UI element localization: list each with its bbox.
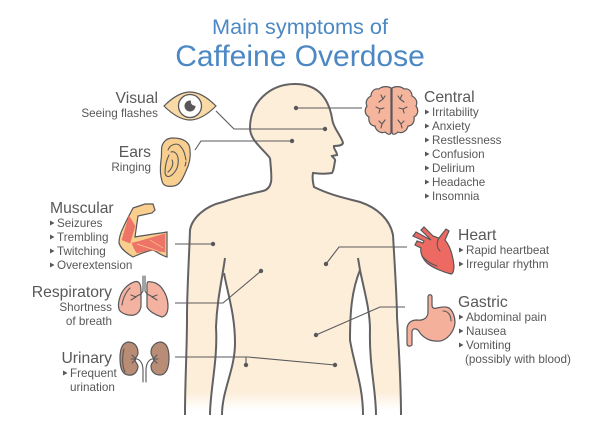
label: muscular: Muscular: [50, 200, 114, 217]
label: gastric: Vomiting: [466, 339, 511, 352]
label: central: Insomnia: [432, 190, 480, 203]
label: central: Anxiety: [432, 120, 470, 133]
label: visual: Seeing flashes: [81, 107, 158, 120]
label: visual: Visual: [116, 90, 158, 107]
label: ears: [111, 144, 151, 174]
label: central: Irritability: [432, 106, 479, 119]
icon: ear: [160, 138, 190, 186]
title: [175, 14, 425, 73]
label: central: Headache: [432, 176, 485, 189]
label: urinary: Urinary: [61, 350, 112, 367]
label: gastric: Gastric: [458, 294, 508, 311]
label: ears: Ears: [119, 144, 151, 161]
label: urinary: [61, 350, 118, 394]
label: central: Central: [424, 89, 475, 106]
label: heart: Irregular rhythm: [466, 258, 548, 271]
label: muscular: Seizures: [57, 217, 103, 230]
label: central: Delirium: [432, 162, 475, 175]
label: respiratory: of breath: [66, 315, 112, 328]
label: gastric: Nausea: [466, 325, 507, 338]
label: central: Confusion: [432, 148, 485, 161]
title: Main symptoms of: [212, 14, 389, 39]
label: gastric: [458, 294, 571, 366]
label: visual: [81, 90, 158, 120]
label: heart: [458, 227, 550, 271]
label: gastric: Abdominal pain: [466, 311, 547, 324]
icon: eye: [164, 92, 216, 120]
title: Caffeine Overdose: [175, 40, 425, 73]
label: central: [424, 89, 502, 203]
label: central: Restlessness: [432, 134, 502, 147]
icon: kidneys: [120, 342, 169, 382]
label: urinary: urination: [70, 381, 115, 394]
label: respiratory: [32, 284, 112, 328]
label: heart: Heart: [458, 227, 497, 244]
label: respiratory: Respiratory: [32, 284, 112, 301]
icon: lungs: [118, 276, 168, 317]
human body silhouette: [180, 84, 406, 418]
label: heart: Rapid heartbeat: [466, 244, 550, 257]
label: gastric: (possibly with blood): [465, 353, 571, 366]
label: urinary: Frequent: [70, 367, 118, 380]
label: ears: Ringing: [111, 161, 151, 174]
icon: flexed arm muscle: [119, 204, 167, 257]
label: muscular: Twitching: [57, 245, 106, 258]
label: respiratory: Shortness: [59, 301, 112, 314]
label: muscular: [50, 200, 132, 272]
label: muscular: Overextension: [57, 259, 132, 272]
icon: brain: [365, 87, 418, 134]
label: muscular: Trembling: [57, 231, 109, 244]
leader lines: [175, 106, 407, 367]
icon: stomach: [407, 295, 455, 346]
icon: heart: [413, 227, 454, 274]
